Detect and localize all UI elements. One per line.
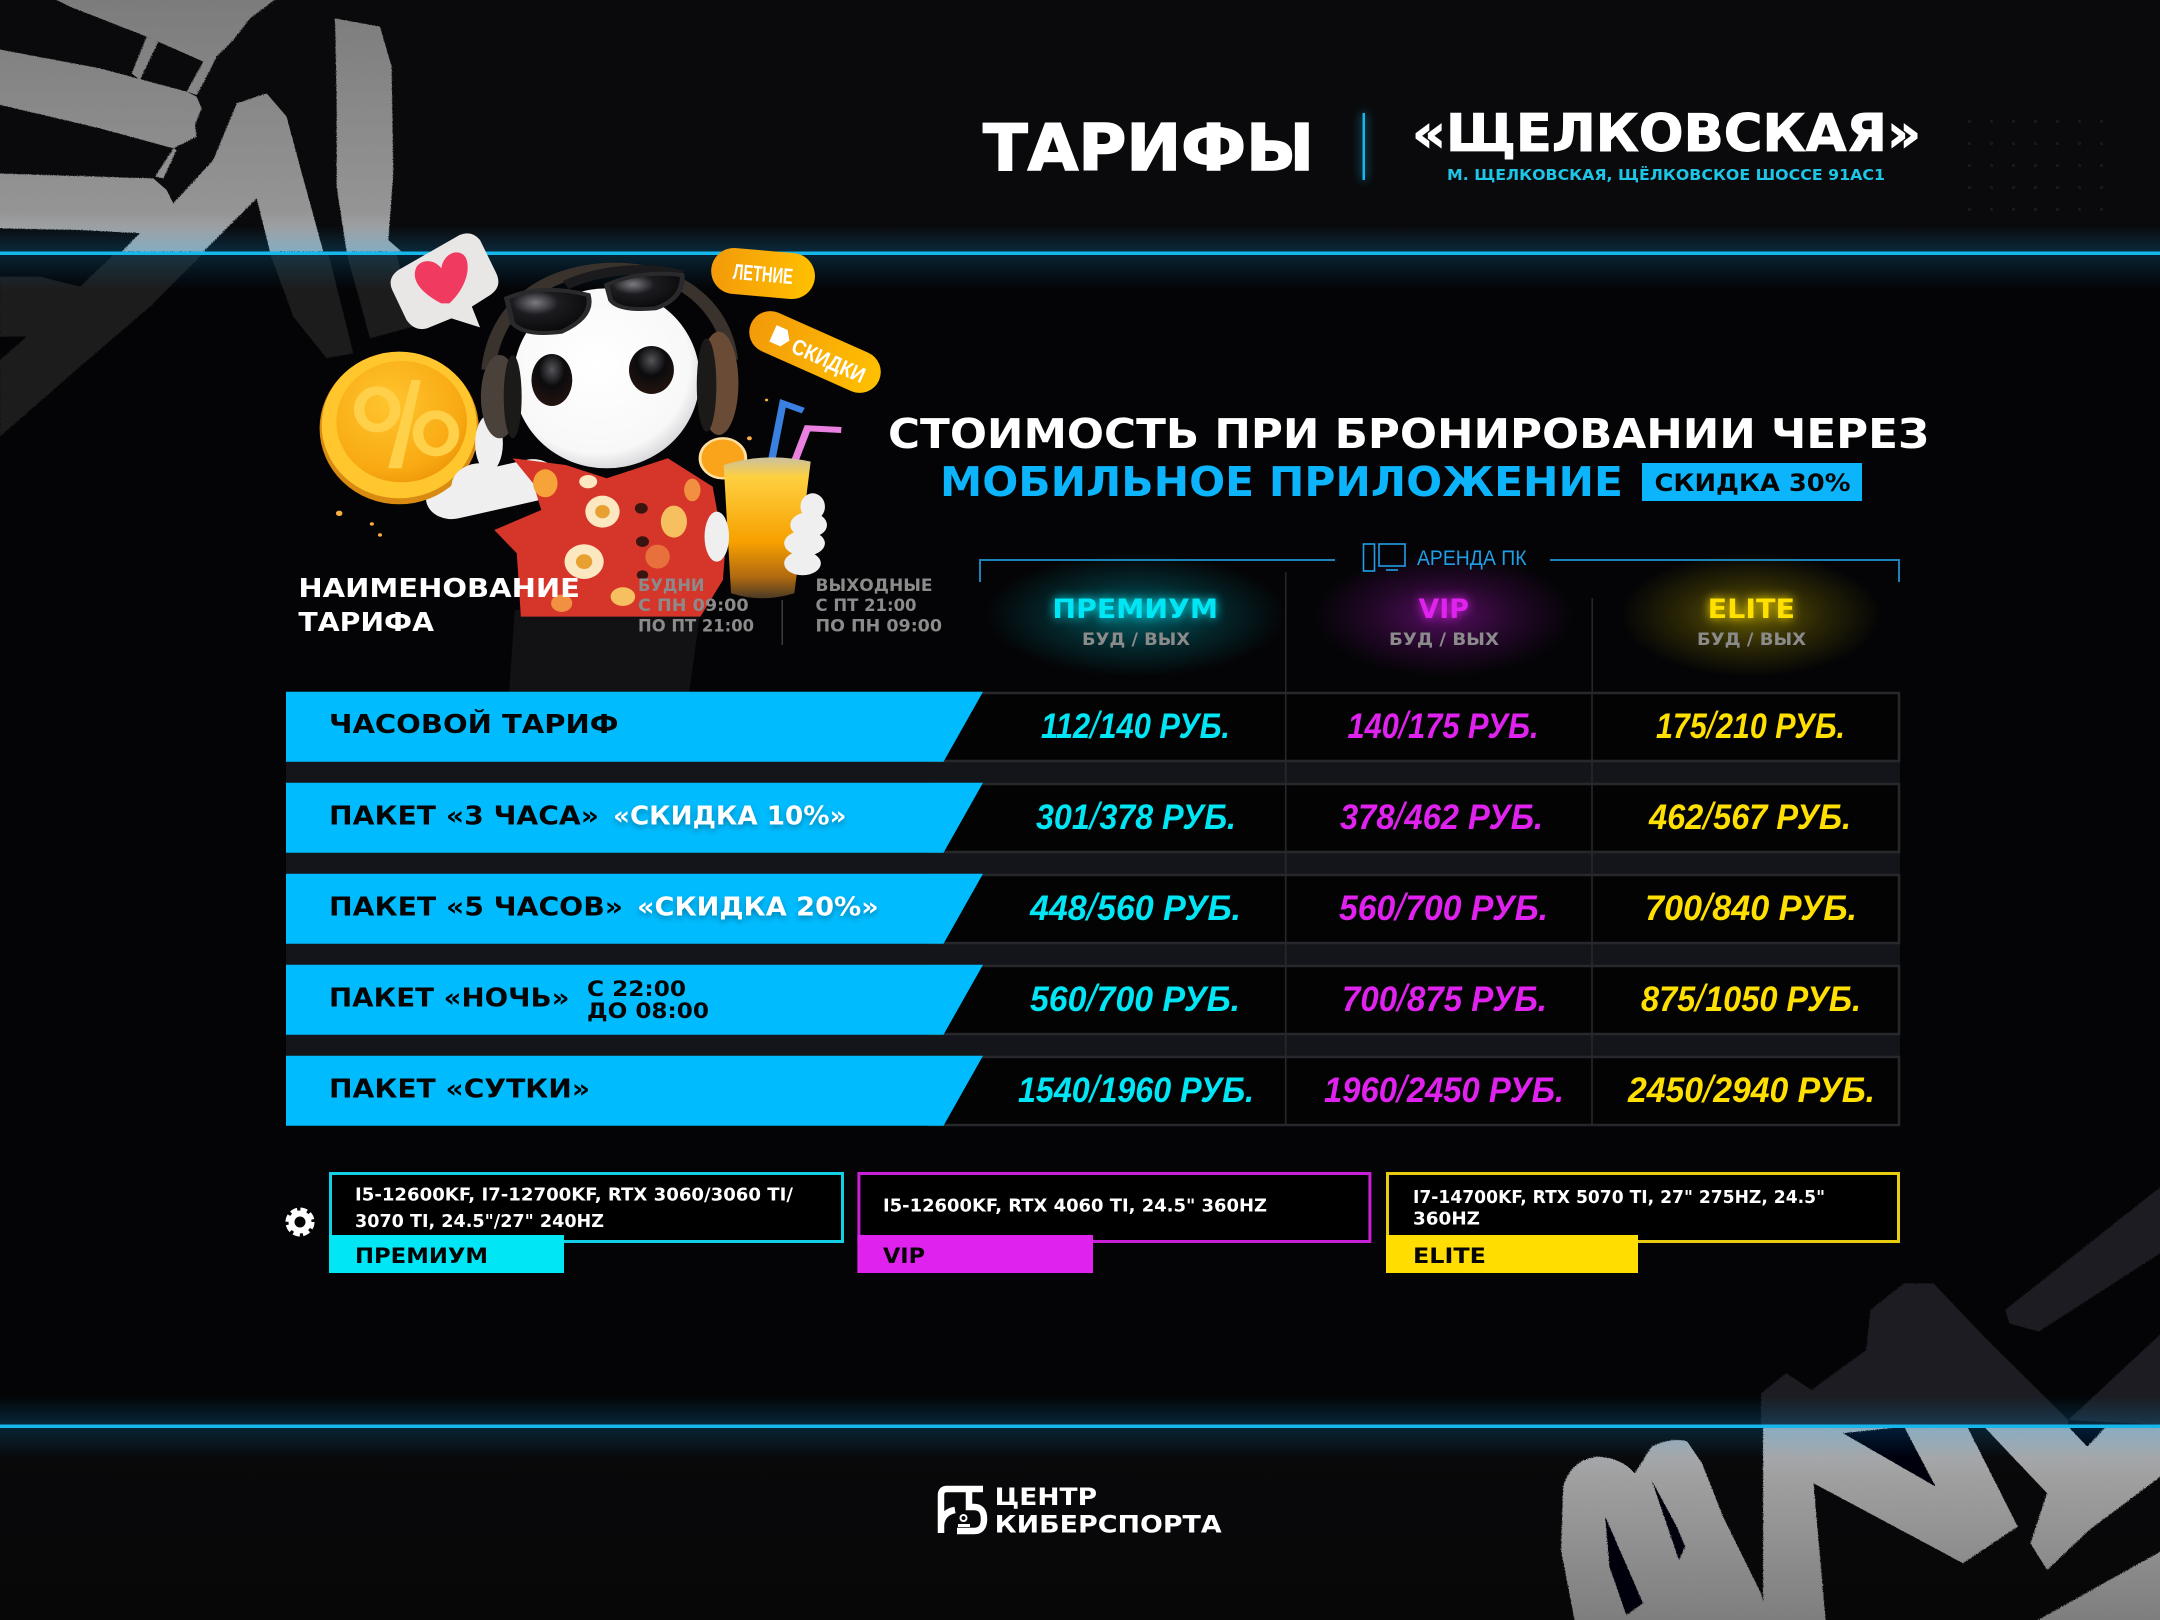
- row: 5 hours: 700/840 РУБ.: [1645, 887, 1857, 929]
- location name: «ЩЕЛКОВСКАЯ»: [1412, 104, 1921, 164]
- spec card: premium: [329, 1174, 842, 1273]
- row: 5 hours: «СКИДКА 20%»: [637, 893, 879, 923]
- coin: [320, 352, 479, 504]
- row: night: [286, 965, 1861, 1035]
- tier glow: premium: [986, 553, 1286, 677]
- row: 3 hours: [286, 783, 1851, 853]
- mascot shirt: [494, 458, 725, 617]
- top neon line: [0, 226, 2160, 290]
- badge: summer: ЛЕТНИЕ: [732, 259, 794, 289]
- tier header: vip: VIP: [1418, 594, 1469, 625]
- spec card: elite: I7-14700KF, RTX 5070 TI, 27" 275HZ, 24.5": [1413, 1188, 1825, 1208]
- discount badge: [1642, 463, 1862, 501]
- row: 3 hours: 301/378 РУБ.: [1036, 796, 1236, 838]
- pink straw: [786, 428, 841, 483]
- tier header: vip: [1389, 594, 1499, 650]
- column divider lines: [1285, 572, 1593, 692]
- icon: computer: [1364, 544, 1405, 571]
- heading line 2: МОБИЛЬНОЕ ПРИЛОЖЕНИЕ: [940, 458, 1623, 506]
- row: night: 700/875 РУБ.: [1342, 978, 1547, 1020]
- spec card: premium: ПРЕМИУМ: [355, 1244, 488, 1268]
- orange slice: [700, 438, 746, 478]
- spec card: elite: ELITE: [1413, 1244, 1486, 1268]
- right hand: [705, 493, 827, 575]
- spec card: vip: VIP: [883, 1244, 925, 1268]
- row: hourly: ЧАСОВОЙ ТАРИФ: [329, 710, 618, 740]
- logo text: ЦЕНТР: [995, 1483, 1097, 1511]
- column name labels: ТАРИФА: [298, 608, 434, 638]
- row: day: 1960/2450 РУБ.: [1324, 1069, 1564, 1111]
- row: night: 875/1050 РУБ.: [1641, 978, 1861, 1020]
- sparks: [336, 399, 768, 537]
- spec card: vip: I5-12600KF, RTX 4060 TI, 24.5" 360HZ: [883, 1197, 1267, 1217]
- row: hourly: 140/175 РУБ.: [1348, 705, 1538, 747]
- row: hourly: 175/210 РУБ.: [1656, 705, 1845, 747]
- spec card: premium: I5-12600KF, I7-12700KF, RTX 3060/3060 TI/: [355, 1186, 794, 1206]
- row: hourly: 112/140 РУБ.: [1041, 705, 1230, 747]
- tier header: premium: [1052, 594, 1218, 650]
- row: hourly: [286, 692, 1845, 762]
- tier header: elite: БУД / ВЫХ: [1697, 630, 1806, 650]
- row: 3 hours: ПАКЕТ «3 ЧАСА»: [329, 801, 599, 831]
- row: 5 hours: ПАКЕТ «5 ЧАСОВ»: [329, 893, 623, 923]
- head: [513, 288, 700, 468]
- drink glass: [724, 457, 811, 598]
- tier header: premium: ПРЕМИУМ: [1052, 594, 1218, 625]
- row: day: ПАКЕТ «СУТКИ»: [329, 1075, 590, 1105]
- weekend hours: ПО ПН 09:00: [816, 616, 942, 636]
- tier glow: elite: [1621, 553, 1881, 677]
- spec card: vip: [857, 1174, 1370, 1273]
- mascot arm holding coin: [451, 480, 533, 498]
- badge: summer: [709, 246, 817, 301]
- hours divider: [782, 600, 783, 645]
- hand at coin: [433, 415, 509, 518]
- mascot pants: [509, 610, 700, 700]
- row: 3 hours: «СКИДКА 10%»: [613, 801, 846, 831]
- header divider: [1362, 113, 1365, 180]
- tier glow: vip: [1314, 553, 1574, 677]
- row: night: С 22:00: [587, 977, 686, 1001]
- eyes: [531, 346, 674, 406]
- graffiti top left, dim part: [0, 253, 413, 437]
- bottom neon line: [0, 1396, 2160, 1458]
- footer logo: [941, 1483, 1222, 1539]
- column name labels: [298, 574, 580, 638]
- tier header: premium: БУД / ВЫХ: [1082, 630, 1190, 650]
- weekend hours: [816, 576, 942, 636]
- rental label: АРЕНДА ПК: [1417, 547, 1527, 570]
- dotted decoration: [1968, 120, 2122, 230]
- address: М. ЩЕЛКОВСКАЯ, ЩЁЛКОВСКОЕ ШОССЕ 91АС1: [1447, 165, 1885, 184]
- spec card: elite: [1386, 1174, 1898, 1273]
- row: day: 1540/1960 РУБ.: [1018, 1069, 1254, 1111]
- weekend hours: ВЫХОДНЫЕ: [816, 576, 932, 596]
- badge: discounts: СКИДКИ: [788, 334, 869, 388]
- footer logo: КИБЕРСПОРТА: [995, 1511, 1222, 1539]
- logo mark: [941, 1489, 984, 1533]
- row: night: ДО 08:00: [587, 999, 709, 1023]
- graffiti bottom right, bright part: [1561, 1427, 2160, 1620]
- row: day: 2450/2940 РУБ.: [1627, 1069, 1875, 1111]
- PC rental header bracket: [980, 544, 1899, 582]
- heading line 1: СТОИМОСТЬ ПРИ БРОНИРОВАНИИ ЧЕРЕЗ: [888, 410, 1929, 458]
- row: 5 hours: 448/560 РУБ.: [1029, 887, 1241, 929]
- row: night: ПАКЕТ «НОЧЬ»: [329, 984, 570, 1014]
- row: 3 hours: 462/567 РУБ.: [1648, 796, 1851, 838]
- weekday hours: ПО ПТ 21:00: [638, 616, 754, 636]
- blue straw: [768, 403, 803, 480]
- spec card: premium: 3070 TI, 24.5"/27" 240HZ: [355, 1212, 604, 1232]
- tier header: vip: БУД / ВЫХ: [1389, 630, 1499, 650]
- graffiti top left, bright part: [0, 0, 402, 252]
- tariff table: [286, 692, 1900, 1126]
- mascot illustration: [320, 233, 887, 700]
- headphone cups: [481, 332, 738, 438]
- row: day: [286, 1056, 1875, 1126]
- row: 3 hours: 378/462 РУБ.: [1340, 796, 1543, 838]
- column name labels: НАИМЕНОВАНИЕ: [298, 574, 580, 604]
- headphone band: [488, 268, 731, 370]
- shirt flowers: [533, 469, 700, 612]
- badge: discounts: [743, 304, 887, 400]
- weekday hours: [638, 576, 754, 636]
- heart bubble: [391, 233, 498, 329]
- weekend hours: С ПТ 21:00: [816, 596, 917, 616]
- spec card: elite: 360HZ: [1413, 1210, 1480, 1230]
- discount badge: СКИДКА 30%: [1654, 469, 1850, 497]
- graffiti bottom right, dim part: [1761, 1183, 2160, 1425]
- table cells backdrop: [286, 693, 1900, 1125]
- tier header: elite: ELITE: [1708, 594, 1795, 625]
- sunglasses: [507, 270, 682, 333]
- header title: ТАРИФЫ: [983, 112, 1314, 186]
- tier header: elite: [1697, 594, 1806, 650]
- heart: [415, 252, 468, 303]
- row: 5 hours: [286, 874, 1857, 944]
- weekday hours: БУДНИ: [638, 576, 704, 596]
- row: 5 hours: 560/700 РУБ.: [1339, 887, 1548, 929]
- weekday hours: С ПН 09:00: [638, 596, 749, 616]
- row: night: 560/700 РУБ.: [1030, 978, 1240, 1020]
- icon: gear: [288, 1210, 312, 1234]
